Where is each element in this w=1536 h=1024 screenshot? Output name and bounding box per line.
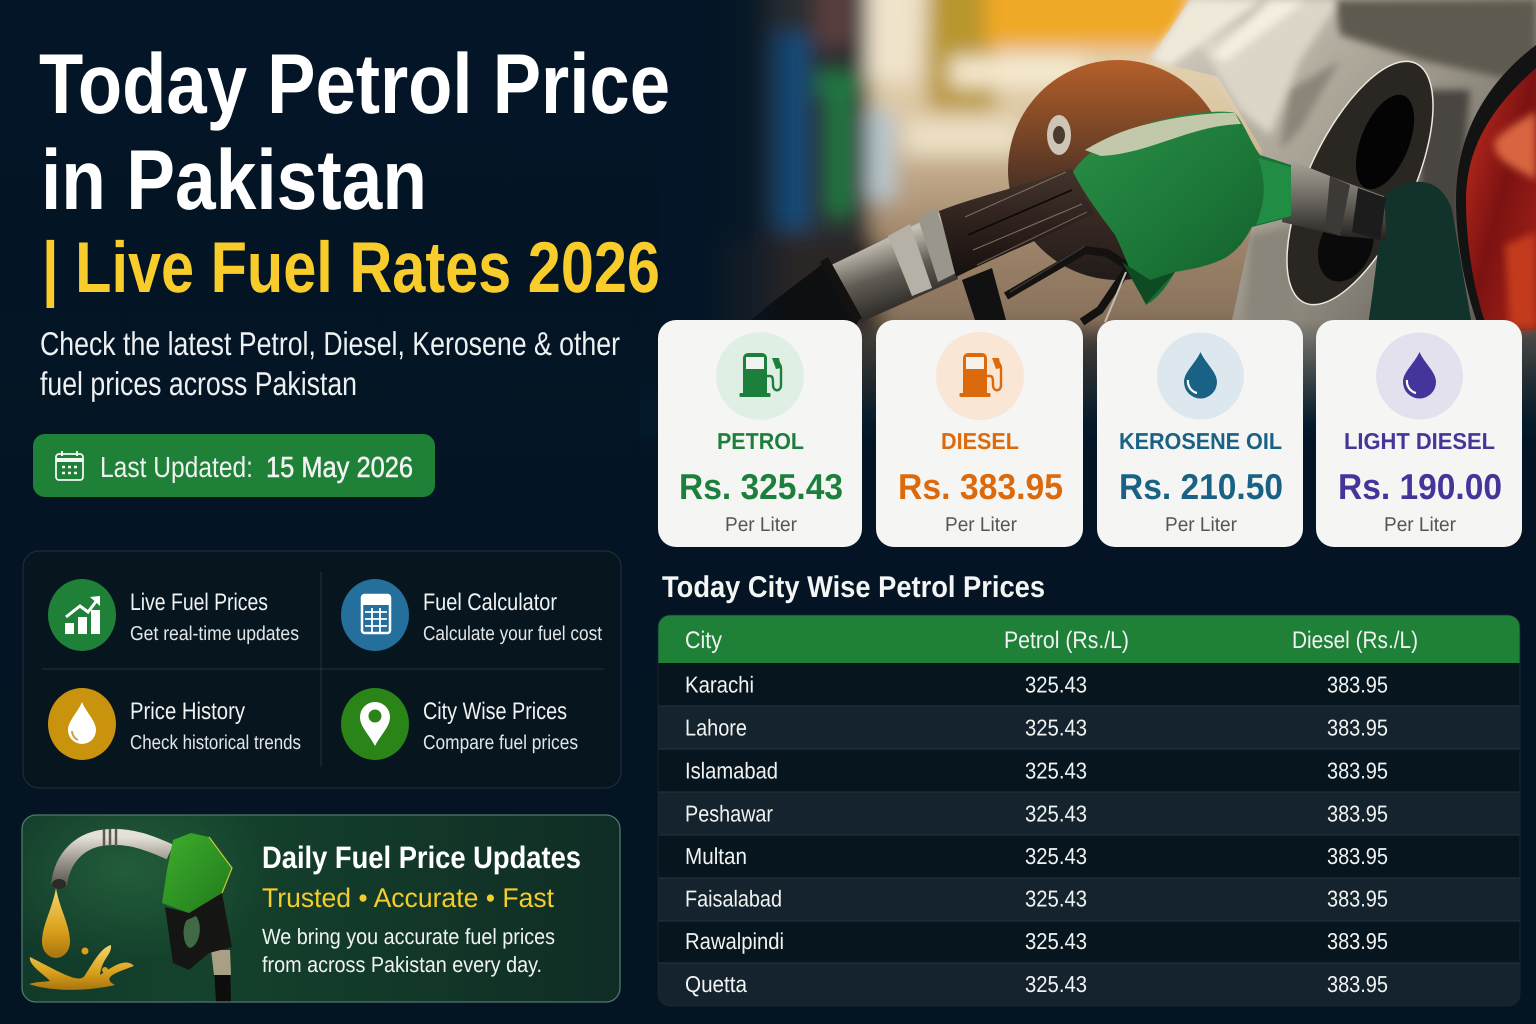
row: Multan: 325.43 [1025,843,1087,869]
card: petrol: PETROL [717,428,804,454]
feature: city wise prices: City Wise Prices [423,698,567,725]
subtitle: Check the latest Petrol, Diesel, Kerosene & other [40,325,620,362]
banner text [262,840,581,977]
row: Quetta [685,971,1388,997]
row: Lahore: Lahore [685,714,747,740]
feature: city wise prices: Compare fuel prices [423,732,578,754]
green nozzle body [1073,112,1291,305]
row: Multan: Multan [685,843,747,869]
row: Karachi: 383.95 [1327,672,1388,698]
feature: fuel calculator [341,579,602,651]
hero photo: fuel nozzle in car tank [726,0,1536,418]
row: Quetta: Quetta [685,971,747,997]
feature: live fuel prices [48,579,299,651]
panel: daily updates banner [21,814,621,1003]
feature: city wise prices [341,688,578,760]
car body [1150,0,1536,450]
banner text: Daily Fuel Price Updates [262,840,581,875]
grip handle [939,168,1094,277]
card: kerosene oil: KEROSENE OIL [1119,428,1282,454]
feature: price history [48,688,301,760]
subtitle: fuel prices across Pakistan [40,365,357,402]
hose [752,265,859,325]
icon: drop [1184,352,1217,398]
banner text: Trusted • Accurate • Fast [262,883,554,913]
feature: fuel calculator: Fuel Calculator [423,589,557,616]
icon: fuel pump [740,353,781,397]
row: Rawalpindi [685,928,1388,954]
row: Lahore: 383.95 [1327,714,1388,740]
illustration: nozzle [52,829,232,1002]
row: Islamabad [685,758,1388,784]
card: diesel: Rs. 383.95 [898,466,1063,507]
metal collar [820,208,958,324]
title: Today Petrol Price [39,37,670,132]
row: Multan [685,843,1388,869]
tail light [1456,45,1536,330]
table: city wise prices [658,615,1520,1006]
card: diesel [876,320,1083,547]
table header: Petrol (Rs./L) [1004,627,1129,654]
row: Lahore: 325.43 [1025,714,1087,740]
heading: city wise table: Today City Wise Petrol Prices [662,571,1045,604]
row: Karachi [685,672,1388,698]
trigger guard [962,246,1129,322]
panel: features [23,551,621,788]
illustration: oil drop and splash [29,888,134,990]
row: Islamabad: Islamabad [685,758,778,784]
row: Faisalabad: 383.95 [1327,886,1388,912]
photo fade overlays [640,0,1536,445]
card: kerosene oil: Per Liter [1165,514,1237,536]
blurred forecourt background [726,0,1262,414]
row: Karachi: Karachi [685,672,754,698]
row: Faisalabad: Faisalabad [685,886,782,912]
row: Peshawar [685,800,1388,826]
card: kerosene oil: Rs. 210.50 [1119,466,1283,507]
spout into tank [1282,160,1387,240]
table header [658,615,1520,663]
feature: price history: Check historical trends [130,732,301,754]
icon: drop [1403,352,1436,398]
card: diesel: Per Liter [945,514,1017,536]
row: Peshawar: 325.43 [1025,800,1087,826]
row: Faisalabad: 325.43 [1025,886,1087,912]
feature: fuel calculator: Calculate your fuel cost [423,623,602,645]
last updated badge: Last Updated: [100,452,253,484]
icon: calendar [56,451,83,480]
row: Karachi: 325.43 [1025,672,1087,698]
feature: live fuel prices: Live Fuel Prices [130,589,268,616]
card: kerosene oil [1097,320,1303,547]
card: petrol [658,320,862,547]
row: Rawalpindi: 325.43 [1025,928,1087,954]
banner text: We bring you accurate fuel prices [262,924,555,949]
card: light diesel: Per Liter [1384,514,1456,536]
feature: price history: Price History [130,698,245,725]
row: Faisalabad [685,886,1388,912]
filler neck opening [1286,60,1472,320]
row: Peshawar: Peshawar [685,800,773,826]
title: | Live Fuel Rates 2026 [42,228,660,308]
row: Rawalpindi: Rawalpindi [685,928,784,954]
card: diesel: DIESEL [941,428,1019,454]
table header: Diesel (Rs./L) [1292,627,1418,654]
row: Peshawar: 383.95 [1327,800,1388,826]
row: Rawalpindi: 383.95 [1327,928,1388,954]
row: Lahore [685,714,1388,740]
table header: City [685,627,722,654]
card: light diesel: Rs. 190.00 [1338,466,1502,507]
card: light diesel: LIGHT DIESEL [1344,428,1495,454]
row: Quetta: 325.43 [1025,971,1087,997]
fuel door [1008,60,1228,280]
icon: fuel pump [960,353,1001,397]
feature: live fuel prices: Get real-time updates [130,623,299,645]
row: Islamabad: 383.95 [1327,758,1388,784]
row: Quetta: 383.95 [1327,971,1388,997]
card: petrol: Rs. 325.43 [679,466,843,507]
last updated badge: 15 May 2026 [266,452,413,484]
banner text: from across Pakistan every day. [262,952,542,977]
subtitle [40,325,620,402]
row: Islamabad: 325.43 [1025,758,1087,784]
card: petrol: Per Liter [725,514,797,536]
title: in Pakistan [41,133,427,228]
last updated badge [33,434,435,497]
title [39,37,670,308]
card: light diesel [1316,320,1522,547]
row: Multan: 383.95 [1327,843,1388,869]
